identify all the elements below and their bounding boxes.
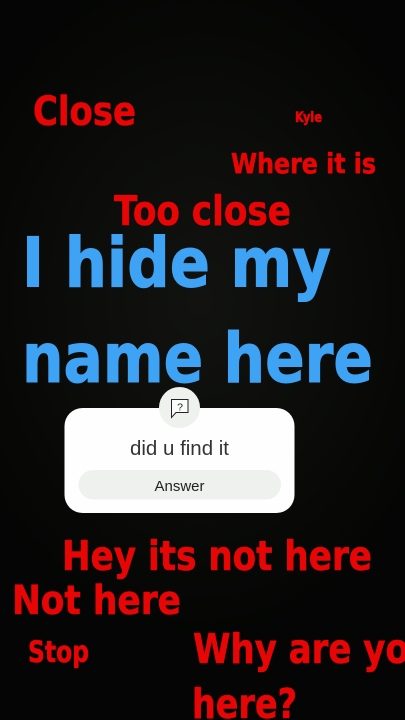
card panel <box>64 408 294 513</box>
phrase: Where it is: Where it is <box>231 147 376 180</box>
question card <box>64 387 294 513</box>
heading line: I hide my: I hide my <box>22 224 331 304</box>
word: Close: Close <box>33 89 136 135</box>
phrase: Why are you here? <box>192 625 405 720</box>
phrase: Not here: Not here <box>12 578 181 624</box>
word: Stop: Stop <box>28 635 89 669</box>
word: Kyle: Kyle <box>295 110 322 126</box>
phrase: Too close: Too close <box>114 187 291 235</box>
card question text: did u find it <box>130 438 229 460</box>
icon: question badge <box>159 387 200 428</box>
answer button <box>78 470 281 500</box>
icon: question badge: ? <box>177 402 183 414</box>
answer button: Answer <box>154 479 205 495</box>
